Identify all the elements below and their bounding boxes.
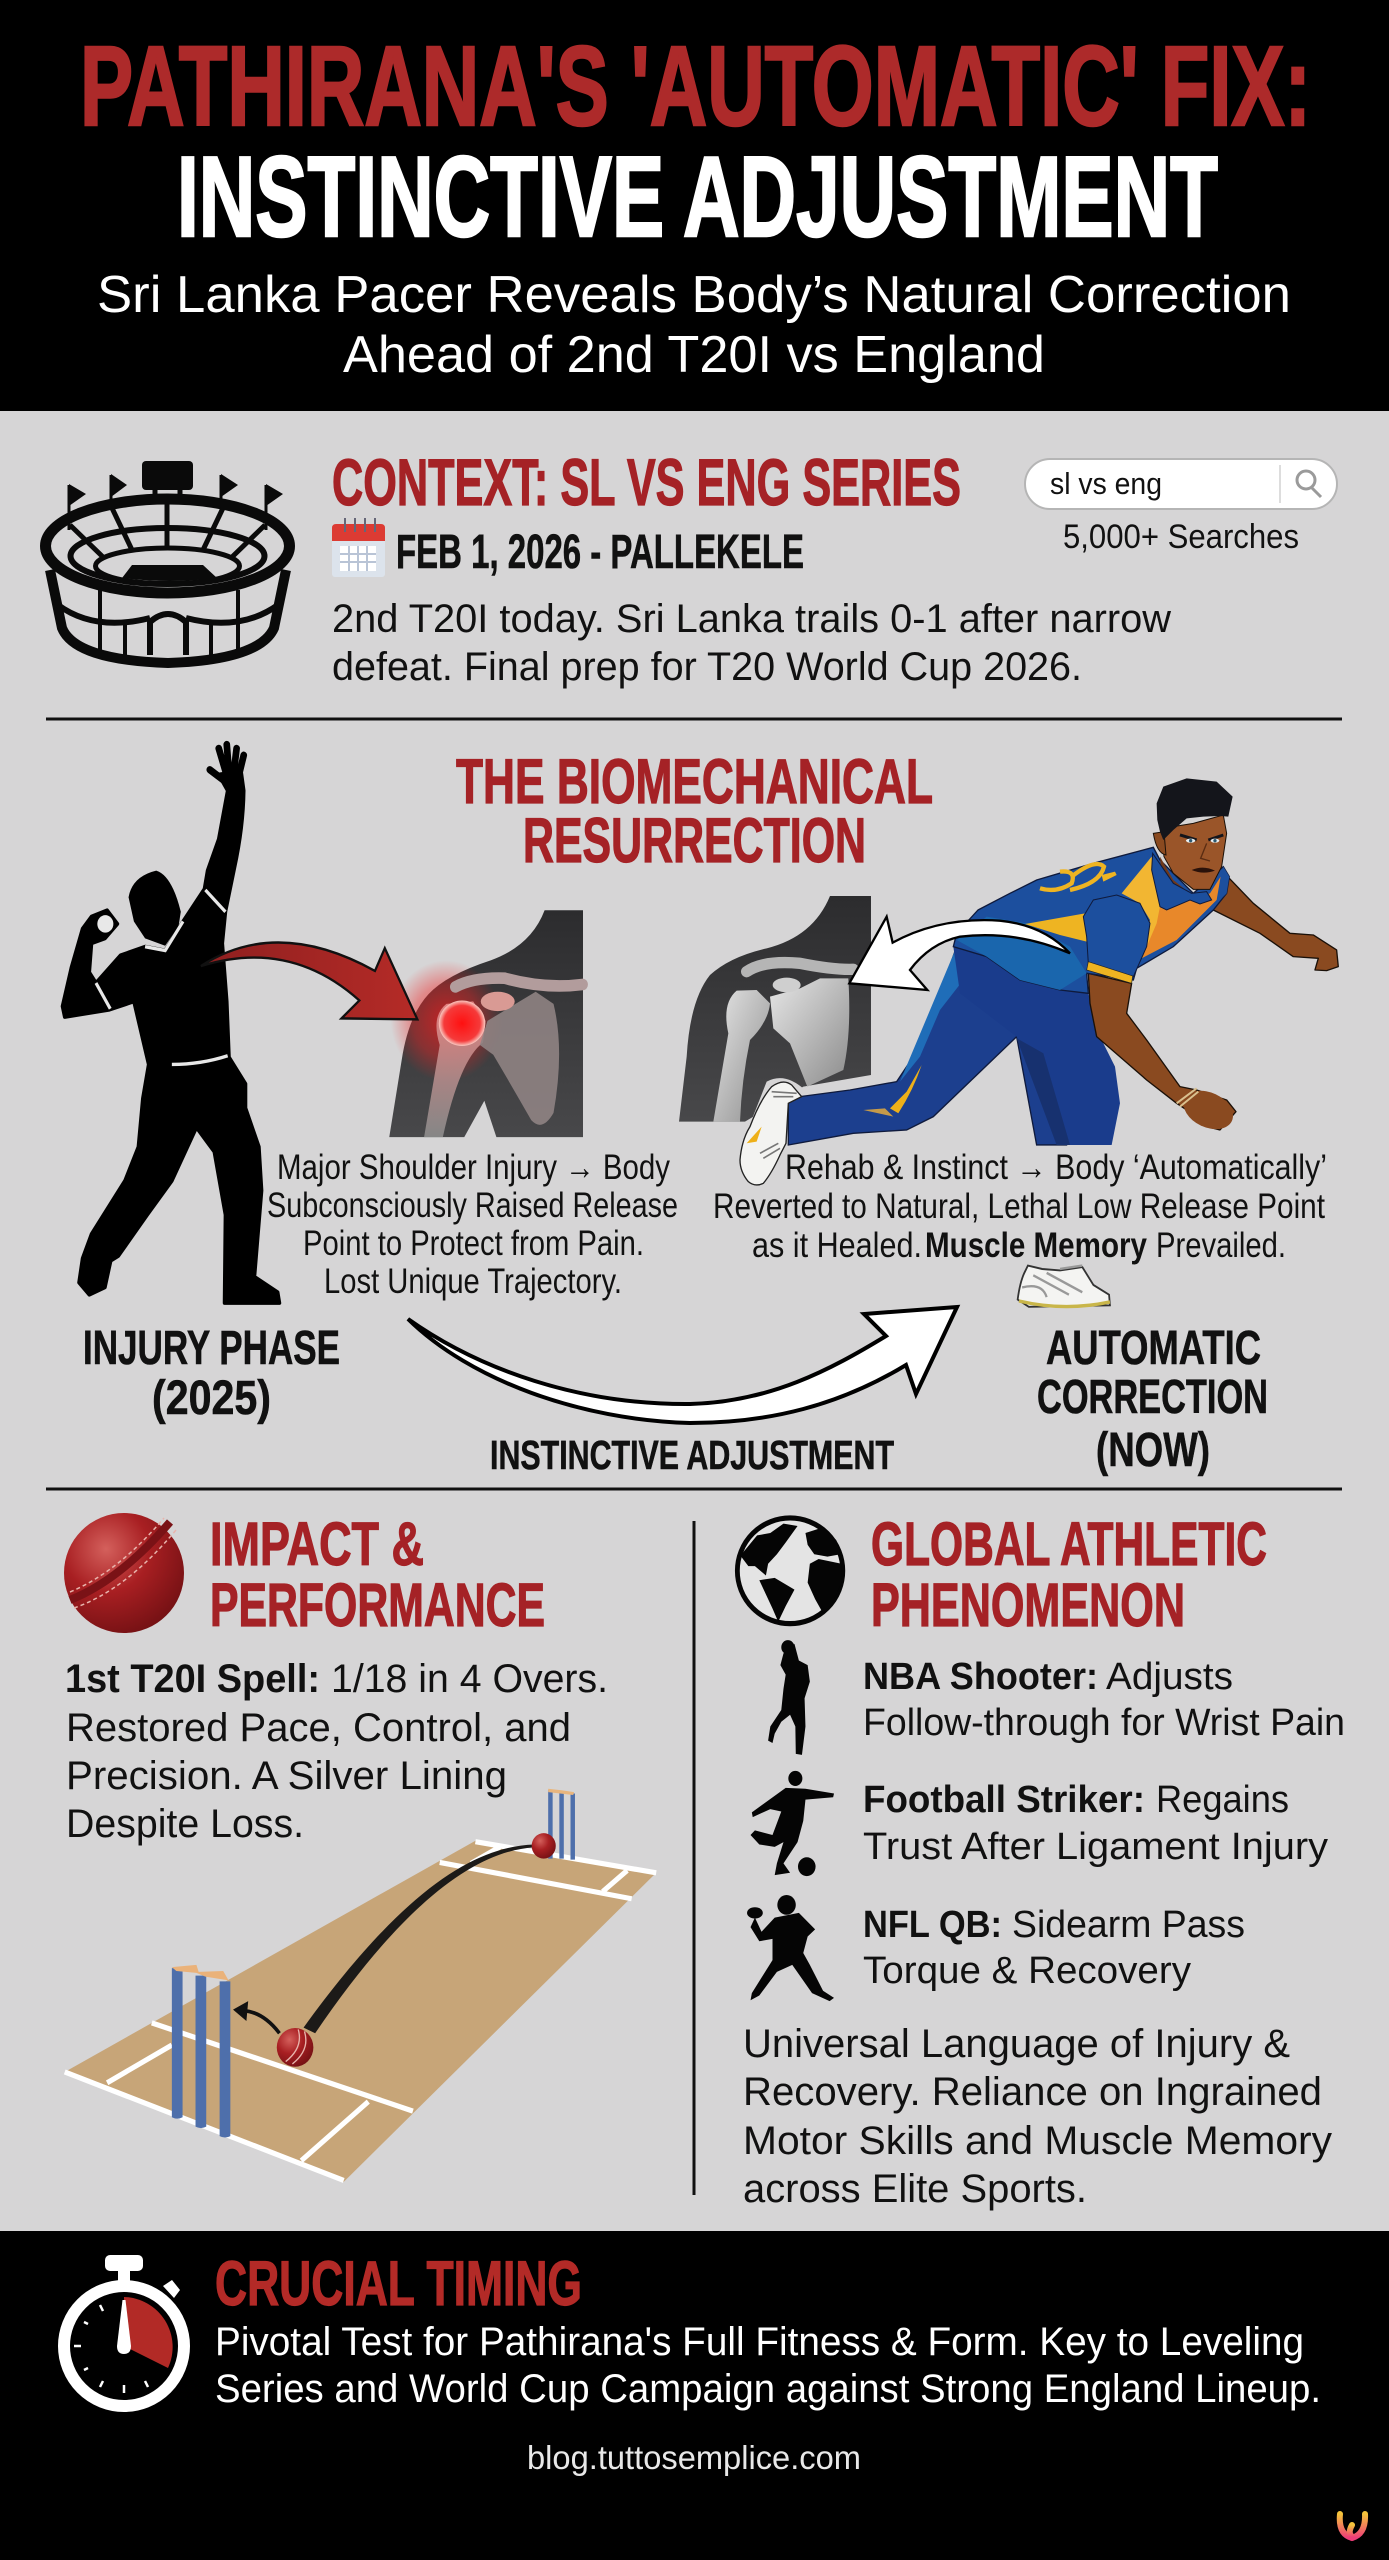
search count: 5,000+ Searches [1063,518,1299,556]
heading: impact [210,1510,545,1639]
text: football striker [863,1779,1328,1868]
heading: context: CONTEXT: SL VS ENG SERIES [332,445,961,519]
heading: global: PHENOMENON [871,1571,1185,1639]
text: correction explanation [713,1148,1327,1265]
text: NFL QB: NFL QB: [863,1904,1002,1946]
text: timing body: Pivotal Test for Pathirana's Full Fitness & Form. Key to Leveling [215,2320,1304,2364]
search box: sl vs eng [1050,466,1162,501]
panel: context [46,445,1337,689]
text: correction explanation: Prevailed. [1156,1226,1286,1265]
label: automatic correction: AUTOMATIC [1046,1322,1261,1375]
icon: white cricket shoe [1018,1266,1110,1307]
collar [1152,853,1212,910]
panel: global athletic phenomenon [737,1510,1345,2211]
icon: basketball shooter [768,1640,810,1755]
arrow: instinctive adjustment sweep [408,1307,957,1423]
label: injury phase: INJURY PHASE [83,1322,340,1375]
text: injury explanation [267,1148,678,1301]
subtitle: Ahead of 2nd T20I vs England [343,326,1045,384]
text: NFL QB [863,1904,1245,1992]
label: instinctive adjustment: INSTINCTIVE ADJUSTMENT [490,1432,894,1478]
text: NBA shooter: Adjusts [1106,1656,1233,1698]
text: timing body: Series and World Cup Campaign against Strong England Lineup. [215,2367,1321,2411]
heading: impact: IMPACT & [210,1510,424,1578]
lower arm [1088,973,1236,1130]
near stumps [172,1965,230,2138]
heading: biomechanical: RESURRECTION [523,806,866,876]
arrow: white to healed shoulder [849,917,1070,990]
text: spell figures: Precision. A Silver Lining [66,1754,507,1798]
icon: corner logo [1340,2514,1365,2538]
near ball [277,2028,313,2067]
heading: crucial timing: CRUCIAL TIMING [215,2249,582,2319]
search box [1025,459,1337,509]
icon: injured shoulder [389,910,583,1137]
text: injury explanation: Point to Protect from Pain. [303,1224,644,1263]
date and venue: FEB 1, 2026 - PALLEKELE [396,526,804,579]
text: football striker: Regains [1156,1779,1289,1821]
text: football striker: Trust After Ligament Injury [863,1826,1328,1868]
panel: biomechanical resurrection [62,745,1338,1478]
panel: impact and performance [64,1510,656,2182]
hair [1157,778,1233,840]
text: NBA shooter: Follow-through for Wrist Pain [863,1702,1345,1744]
jersey [953,847,1229,993]
text: injury explanation: Major Shoulder Injury → Body [277,1148,670,1187]
front leg [953,947,1120,1145]
facial features [1180,835,1223,840]
label: injury phase: (2025) [152,1372,271,1425]
context body text: 2nd T20I today. Sri Lanka trails 0-1 after narrow [332,597,1171,641]
icon: healed shoulder [679,896,871,1122]
face [1162,815,1227,889]
text: spell figures: 1/18 in 4 Overs. [331,1657,608,1701]
text: universal language: Motor Skills and Muscle Memory [743,2119,1332,2163]
neck [1160,857,1190,907]
icon: football striker [751,1771,834,1876]
text: spell figures: Restored Pace, Control, and [66,1706,571,1750]
small deflection arrow [233,2001,279,2033]
text: NBA shooter: NBA Shooter: [863,1656,1098,1698]
heading: biomechanical [456,747,933,876]
text: universal language: Universal Language of Injury & [743,2022,1290,2066]
text: spell figures: Despite Loss. [66,1802,304,1846]
arrow: red to injured shoulder [201,942,417,1019]
subtitle: Sri Lanka Pacer Reveals Body’s Natural Correction [97,266,1291,324]
icon: globe [737,1518,843,1624]
chart: cricket pitch with ball trajectory [65,1789,656,2182]
heading: global [871,1510,1267,1639]
text: NFL QB: Sidearm Pass [1012,1904,1245,1946]
trajectory [304,1844,533,2033]
text: injury explanation: Subconsciously Raised Release [267,1186,678,1225]
icon: bowler silhouette, injury phase [62,745,279,1303]
subtitle [97,266,1291,384]
text: NFL QB: Torque & Recovery [863,1950,1191,1992]
torso, arms and head [953,778,1338,1145]
icon: NFL quarterback [747,1895,834,2001]
icon: stadium [46,461,290,663]
heading: impact: PERFORMANCE [210,1571,545,1639]
text: correction explanation: as it Healed. [752,1226,922,1265]
label: automatic correction [1037,1322,1268,1477]
label: automatic correction: CORRECTION [1037,1371,1268,1424]
text: timing body [215,2320,1321,2411]
icon: magnifier [1297,471,1321,497]
context body text: defeat. Final prep for T20 World Cup 2026. [332,645,1082,689]
footer band: crucial timing [0,2231,1389,2560]
heading: biomechanical: THE BIOMECHANICAL [456,747,933,817]
text: injury explanation: Lost Unique Trajectory. [324,1262,622,1301]
icon: stopwatch [64,2255,184,2406]
upper arm [1213,878,1338,971]
text: football striker: Football Striker: [863,1779,1145,1821]
icon: calendar [332,518,385,577]
text: universal language [743,2022,1332,2211]
text: NBA shooter [863,1656,1345,1744]
header band [0,0,1389,411]
context body text [332,597,1171,689]
icon: bowler illustration, automatic correction [733,778,1338,1190]
label: automatic correction: (NOW) [1096,1424,1210,1477]
text: universal language: across Elite Sports. [743,2167,1087,2211]
far ball [532,1833,556,1859]
trailing leg and shoe [733,947,1097,1190]
far stumps [548,1789,575,1860]
text: spell figures: 1st T20I Spell: [65,1657,320,1701]
icon: cricket ball [64,1513,184,1633]
label: injury phase [83,1322,340,1425]
text: correction explanation: Muscle Memory [925,1226,1147,1265]
text: spell figures [65,1657,608,1846]
text: source site: blog.tuttosemplice.com [527,2439,861,2476]
text: universal language: Recovery. Reliance on Ingrained [743,2070,1322,2114]
